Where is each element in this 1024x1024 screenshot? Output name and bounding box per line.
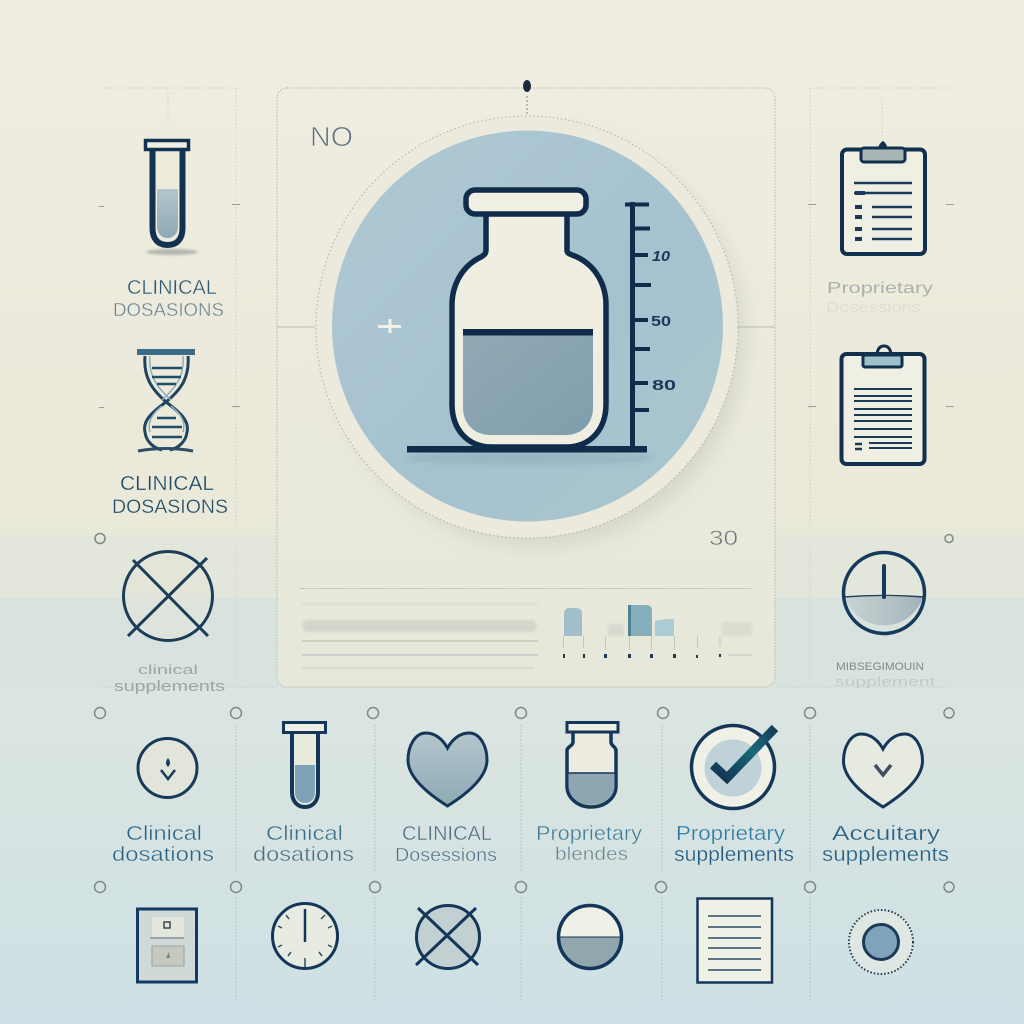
- left column label 3: [114, 662, 225, 695]
- right column: half-filled gauge: [843, 552, 925, 634]
- row 1 label 4: [536, 823, 642, 864]
- left column label 1: [113, 277, 224, 320]
- row 1 label 1: Clinical: [126, 823, 202, 845]
- row 1 icon: filled heart: [408, 733, 487, 806]
- row 1 label 1: dosations: [112, 844, 214, 866]
- row 1 label 2: dosations: [253, 844, 354, 866]
- left column label 2: DOSASIONS: [112, 497, 228, 518]
- row 2 icon: crossed circle: [416, 906, 480, 968]
- left column label 1: DOSASIONS: [113, 300, 224, 320]
- row 1 label 3: Dosessions: [395, 845, 497, 865]
- small circle markers: [94, 534, 954, 892]
- white crosshair: [378, 319, 401, 333]
- row 1 label 6: [822, 823, 949, 866]
- left column label 1: CLINICAL: [127, 277, 217, 299]
- row 1 label 5: supplements: [674, 844, 794, 866]
- left column: test tube: [146, 140, 198, 255]
- left column: crossed circle: [124, 552, 212, 640]
- label: NO: NO: [310, 121, 353, 152]
- row 2 icon: dotted target: [849, 910, 913, 974]
- row 2 icon: clock: [272, 904, 338, 968]
- central dial disc: [277, 116, 775, 546]
- measuring scale: 80: [652, 377, 676, 394]
- row 1 label 5: Proprietary: [676, 823, 785, 845]
- right column label 3: [835, 661, 936, 689]
- left column label 3: supplements: [114, 678, 225, 695]
- row 1 label 4: blendes: [555, 844, 628, 864]
- row 1 icon: outlined heart: [844, 734, 922, 807]
- row 1 label 2: [253, 823, 354, 866]
- left column label 2: CLINICAL: [120, 473, 214, 495]
- row 1 label 3: CLINICAL: [402, 823, 492, 845]
- right column: clipboard 2: [842, 346, 924, 464]
- row 1 label 4: Proprietary: [536, 823, 642, 845]
- label: 30: 30: [709, 527, 738, 550]
- row 1 icon: bottle: [567, 722, 618, 807]
- left column: DNA icon: [137, 349, 195, 451]
- right column label 1: [826, 280, 933, 316]
- left column label 2: [112, 473, 228, 518]
- row 1 icon: check badge: [692, 726, 775, 808]
- right column label 1: Dosessions: [826, 299, 921, 316]
- left column label 3: clinical: [138, 662, 198, 677]
- right column: clipboard 1: [842, 141, 925, 254]
- row 1 label 2: Clinical: [266, 823, 343, 845]
- mini bar chart and text rows: [300, 588, 752, 669]
- measuring scale: [625, 202, 676, 448]
- bottle illustration: [405, 190, 655, 465]
- row 1 label 3: [395, 823, 497, 865]
- row 1 label 5: [674, 823, 794, 866]
- right column label 3: MIBSEGIMOUIN: [836, 661, 924, 673]
- row 1 icon: drop circle: [138, 738, 197, 798]
- row 2 icon: half circle: [558, 906, 622, 968]
- row 1 label 1: [112, 823, 214, 866]
- row 1 label 6: Accuitary: [832, 823, 940, 845]
- panel: central card: [277, 80, 775, 687]
- row 1 icon: test tube: [284, 722, 326, 807]
- top pointer dot: [523, 80, 531, 120]
- right column label 1: Proprietary: [827, 280, 933, 297]
- row 2 icon: document: [698, 898, 772, 982]
- measuring scale: 50: [651, 313, 671, 330]
- row 1 label 6: supplements: [822, 844, 949, 866]
- row 2 icon: dosage card: [138, 909, 196, 982]
- measuring scale: 10: [652, 248, 671, 265]
- right column label 3: supplement: [835, 674, 936, 689]
